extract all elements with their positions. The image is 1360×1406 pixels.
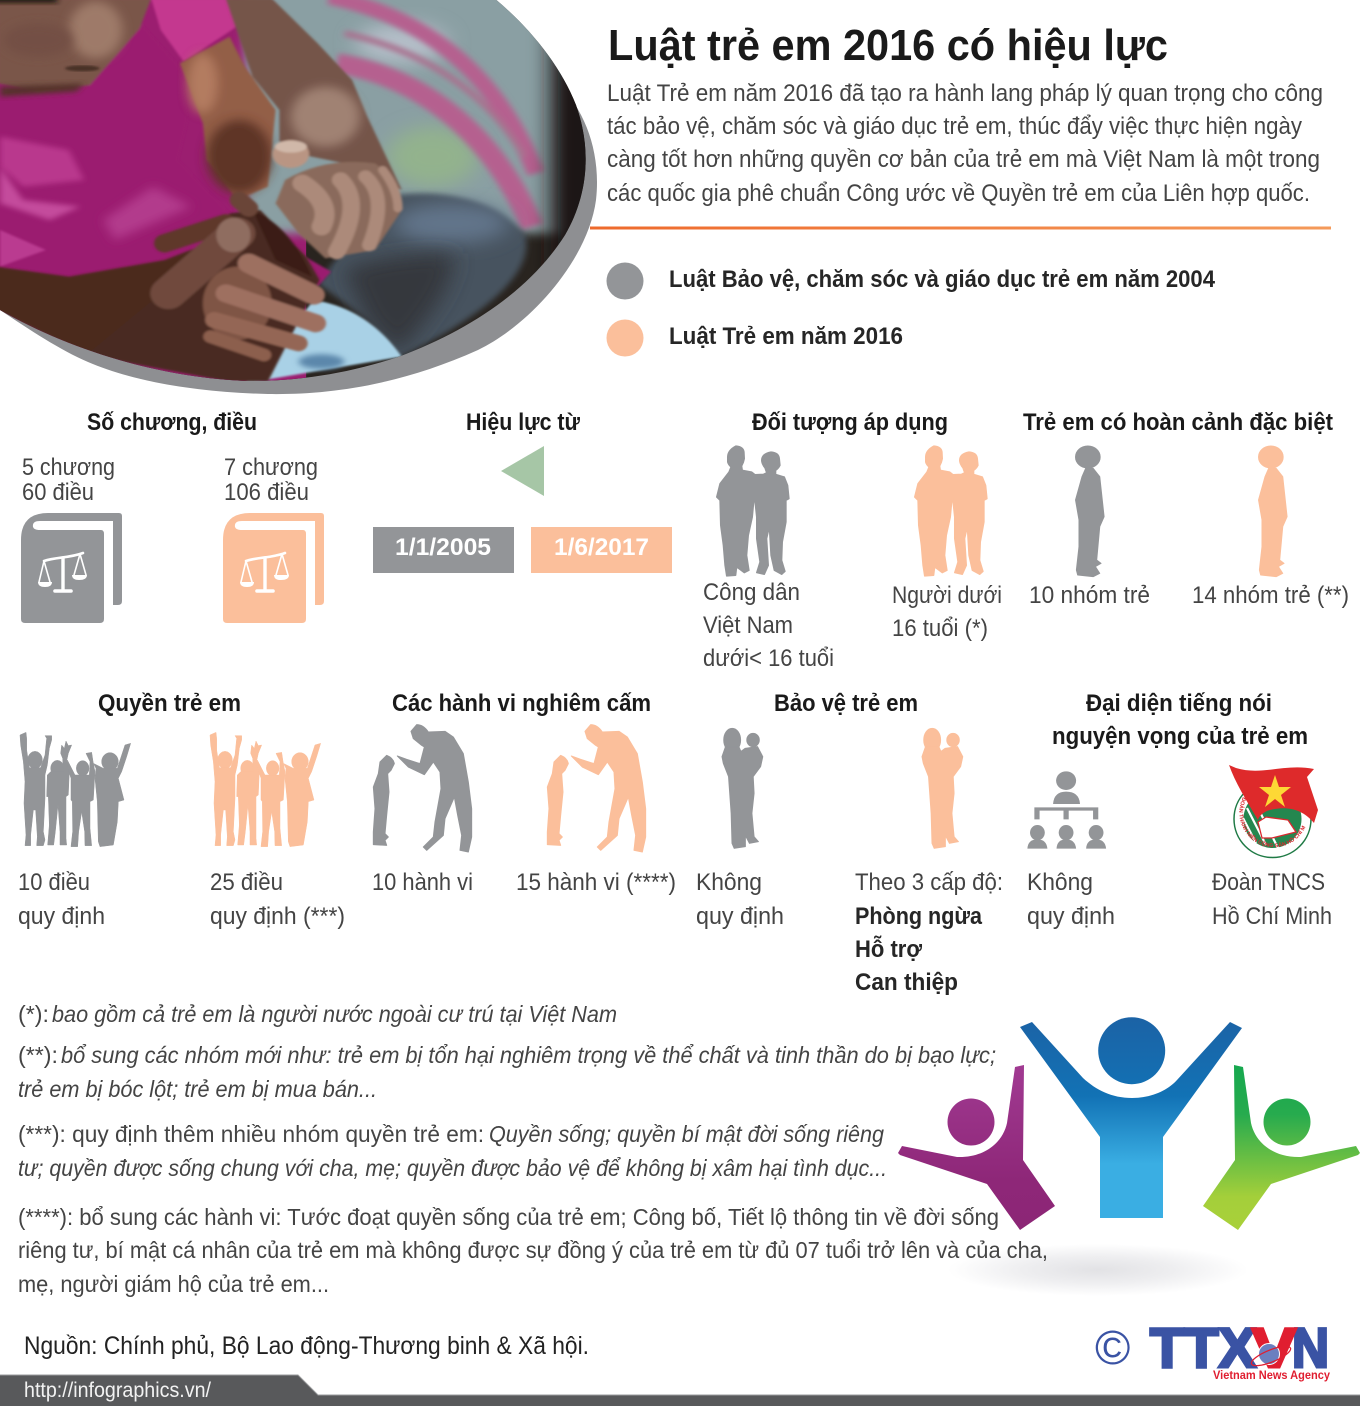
2016 rights: quy định (***) [210,903,345,930]
date 2005 [373,527,514,573]
footnote 2 [18,1042,996,1102]
2016 protection levels: Theo 3 cấp độ: [855,869,1003,896]
illustration: three stylised children [898,1017,1360,1296]
heading: Đại diện tiếng nói [1086,690,1272,717]
photo: adult hands holding a child's hand [0,0,628,400]
legend item: 2004 law [606,262,1216,300]
icon: grey adult scolding child [373,725,472,852]
icon: grey child [1076,446,1104,577]
footnote 1: bao gồm cả trẻ em là người nước ngoài cư trú tại Việt Nam [52,1001,617,1027]
heading: Bảo vệ trẻ em [774,690,918,717]
2016 rights: 25 điều [210,869,283,896]
footnote 1: (*): [18,1001,49,1027]
footnote 3: (***): quy định thêm nhiều nhóm quyền trẻ em: [18,1121,484,1147]
footnote 4: riêng tư, bí mật cá nhân của trẻ em mà không được sự đồng ý của trẻ em từ đủ 07 tuổi trở lên và của cha, [18,1237,1048,1263]
orange divider [590,226,1331,230]
ground shadow [948,1244,1248,1296]
intro text: các quốc gia phê chuẩn Công ước về Quyền trẻ em của Liên hợp quốc. [607,180,1310,207]
date 2017: 1/6/2017 [554,534,649,561]
2004 subject text: Việt Nam [703,612,793,639]
upper child hand [276,162,402,258]
footnote 4: (****): bổ sung các hành vi: Tước đoạt quyền sống của trẻ em; Công bố, Tiết lộ thông tin về đời sống [18,1204,999,1230]
globe [1249,1343,1293,1369]
panel: representing children's voice [1027,690,1332,930]
shirt body [306,256,332,286]
youth union text: Đoàn TNCS [1212,869,1325,896]
2016 label: 106 điều [224,479,309,506]
footnote 2: bổ sung các nhóm mới như: trẻ em bị tổn hại nghiêm trọng về thể chất và tinh thần do bị bạo lực; [61,1042,996,1068]
2004 subject text [703,579,834,672]
intro text: tác bảo vệ, chăm sóc và giáo dục trẻ em, thúc đẩy việc thực hiện ngày [607,113,1302,140]
lower arm and adult hand [0,233,233,355]
no representation text: quy định [1027,903,1115,930]
footnotes [18,1001,1048,1297]
purple figure [898,1065,1055,1230]
2016 subject text: Người dưới [892,582,1002,609]
2004 protection [696,869,784,930]
panel: child protection [696,690,1003,996]
icon: Ho Chi Minh Youth Union badge [1229,765,1318,858]
lower child hand [203,267,272,340]
intro text [607,80,1323,207]
2016 protection levels: Phòng ngừa [855,903,983,930]
2004 rights: 10 điều [18,869,90,896]
heading: Hiệu lực từ [466,409,581,436]
legend [606,262,1216,356]
footnote 4: mẹ, người giám hộ của trẻ em... [18,1271,329,1297]
arrow [501,446,544,496]
heading: Đối tượng áp dụng [752,409,948,436]
icon: grey mother and child [722,728,763,848]
2004 protection: quy định [696,903,784,930]
footnote 3: Quyền sống; quyền bí mật đời sống riêng [489,1121,884,1147]
panel: number of chapters and articles [21,409,324,623]
wordmark: N [1292,1316,1329,1379]
legend item: 2004 law: Luật Bảo vệ, chăm sóc và giáo dục trẻ em năm 2004 [669,266,1216,293]
icon: grey two boys [717,446,789,576]
green figure [1203,1065,1360,1230]
heading [1052,690,1308,750]
2016 subject text: 16 tuổi (*) [892,615,988,642]
2016 label: 7 chương [224,454,318,481]
tagline: Vietnam News Agency [1213,1368,1330,1382]
icon: peach law book [223,513,324,623]
heading: nguyện vọng của trẻ em [1052,723,1308,750]
2004 label: 60 điều [22,479,94,506]
youth union text [1212,869,1332,930]
blue figure [1020,1017,1242,1218]
title: Luật trẻ em 2016 có hiệu lực [608,21,1168,70]
no representation text [1027,869,1115,930]
heading: Các hành vi nghiêm cấm [392,690,651,717]
legend item: 2016 law: Luật Trẻ em năm 2016 [669,323,903,350]
footnote 2: (**): [18,1042,58,1068]
2016 label [224,454,318,506]
2004 label [22,454,115,506]
2004 rights: quy định [18,903,105,930]
child arm [180,37,276,200]
date 2005: 1/1/2005 [395,534,491,561]
intro text: Luật Trẻ em năm 2016 đã tạo ra hành lang pháp lý quan trọng cho công [607,80,1323,107]
footnote 4 [18,1204,1048,1297]
icon: grey group of children [20,732,131,847]
2016 protection levels [855,869,1003,996]
icon: peach mother and child [922,728,963,848]
panel: effective from [373,409,672,573]
icon: organisation chart [1027,771,1106,849]
copyright symbol: © [1095,1322,1130,1375]
panel: children in special circumstances [1023,409,1349,609]
2004 protection: Không [696,869,762,896]
footnote 3: tư; quyền được sống chung với cha, mẹ; quyền được bảo vệ để không bị xâm hại tình dục... [18,1155,887,1181]
heading: Trẻ em có hoàn cảnh đặc biệt [1023,409,1333,436]
wordmark [1150,1316,1329,1379]
2016 protection levels: Can thiệp [855,969,958,996]
youth union text: Hồ Chí Minh [1212,903,1332,930]
legend item: 2016 law [606,320,903,356]
2004 acts: 10 hành vi [372,869,473,896]
website url: http://infographics.vn/ [24,1379,211,1402]
2016 rights [210,869,345,930]
no representation text: Không [1027,869,1093,896]
2004 subject text: Công dân [703,579,800,606]
panel: children's rights [18,690,345,930]
2004 label: 5 chương [22,454,115,481]
date 2017 [531,527,672,573]
intro text: càng tốt hơn những quyền cơ bản của trẻ em mà Việt Nam là một trong [607,146,1320,173]
footnote 2: trẻ em bị bóc lột; trẻ em bị mua bán... [18,1076,377,1102]
2004 rights [18,869,105,930]
panel: prohibited acts [372,690,676,896]
2016 protection levels: Hỗ trợ [855,935,923,963]
icon: peach two boys [915,446,987,576]
heading: Số chương, điều [87,409,257,436]
2004 subject text: dưới< 16 tuổi [703,645,834,672]
heading: Quyền trẻ em [98,690,241,717]
2016 acts: 15 hành vi (****) [516,869,676,896]
adult arm [226,0,402,190]
logo: TTXVN [1095,1316,1330,1382]
wordmark: V [1252,1316,1296,1379]
icon: peach child [1259,446,1287,577]
wordmark: TTX [1150,1316,1256,1379]
panel: applicable subjects [703,409,1002,672]
2004 groups: 10 nhóm trẻ [1029,582,1150,609]
icon: Ho Chi Minh Youth Union badge: ĐOÀN THANH NIÊN CỘNG SẢN HỒ CHÍ MINH [1239,797,1306,848]
icon: peach group of children [210,732,321,847]
2016 subject text [892,582,1002,642]
icon: peach adult scolding child [547,725,646,852]
footnote 3 [18,1121,887,1181]
source: Nguồn: Chính phủ, Bộ Lao động-Thương binh & Xã hội. [24,1332,589,1360]
2016 groups: 14 nhóm trẻ (**) [1192,582,1349,609]
footer bar [0,1375,1360,1406]
icon: grey law book [21,513,122,623]
